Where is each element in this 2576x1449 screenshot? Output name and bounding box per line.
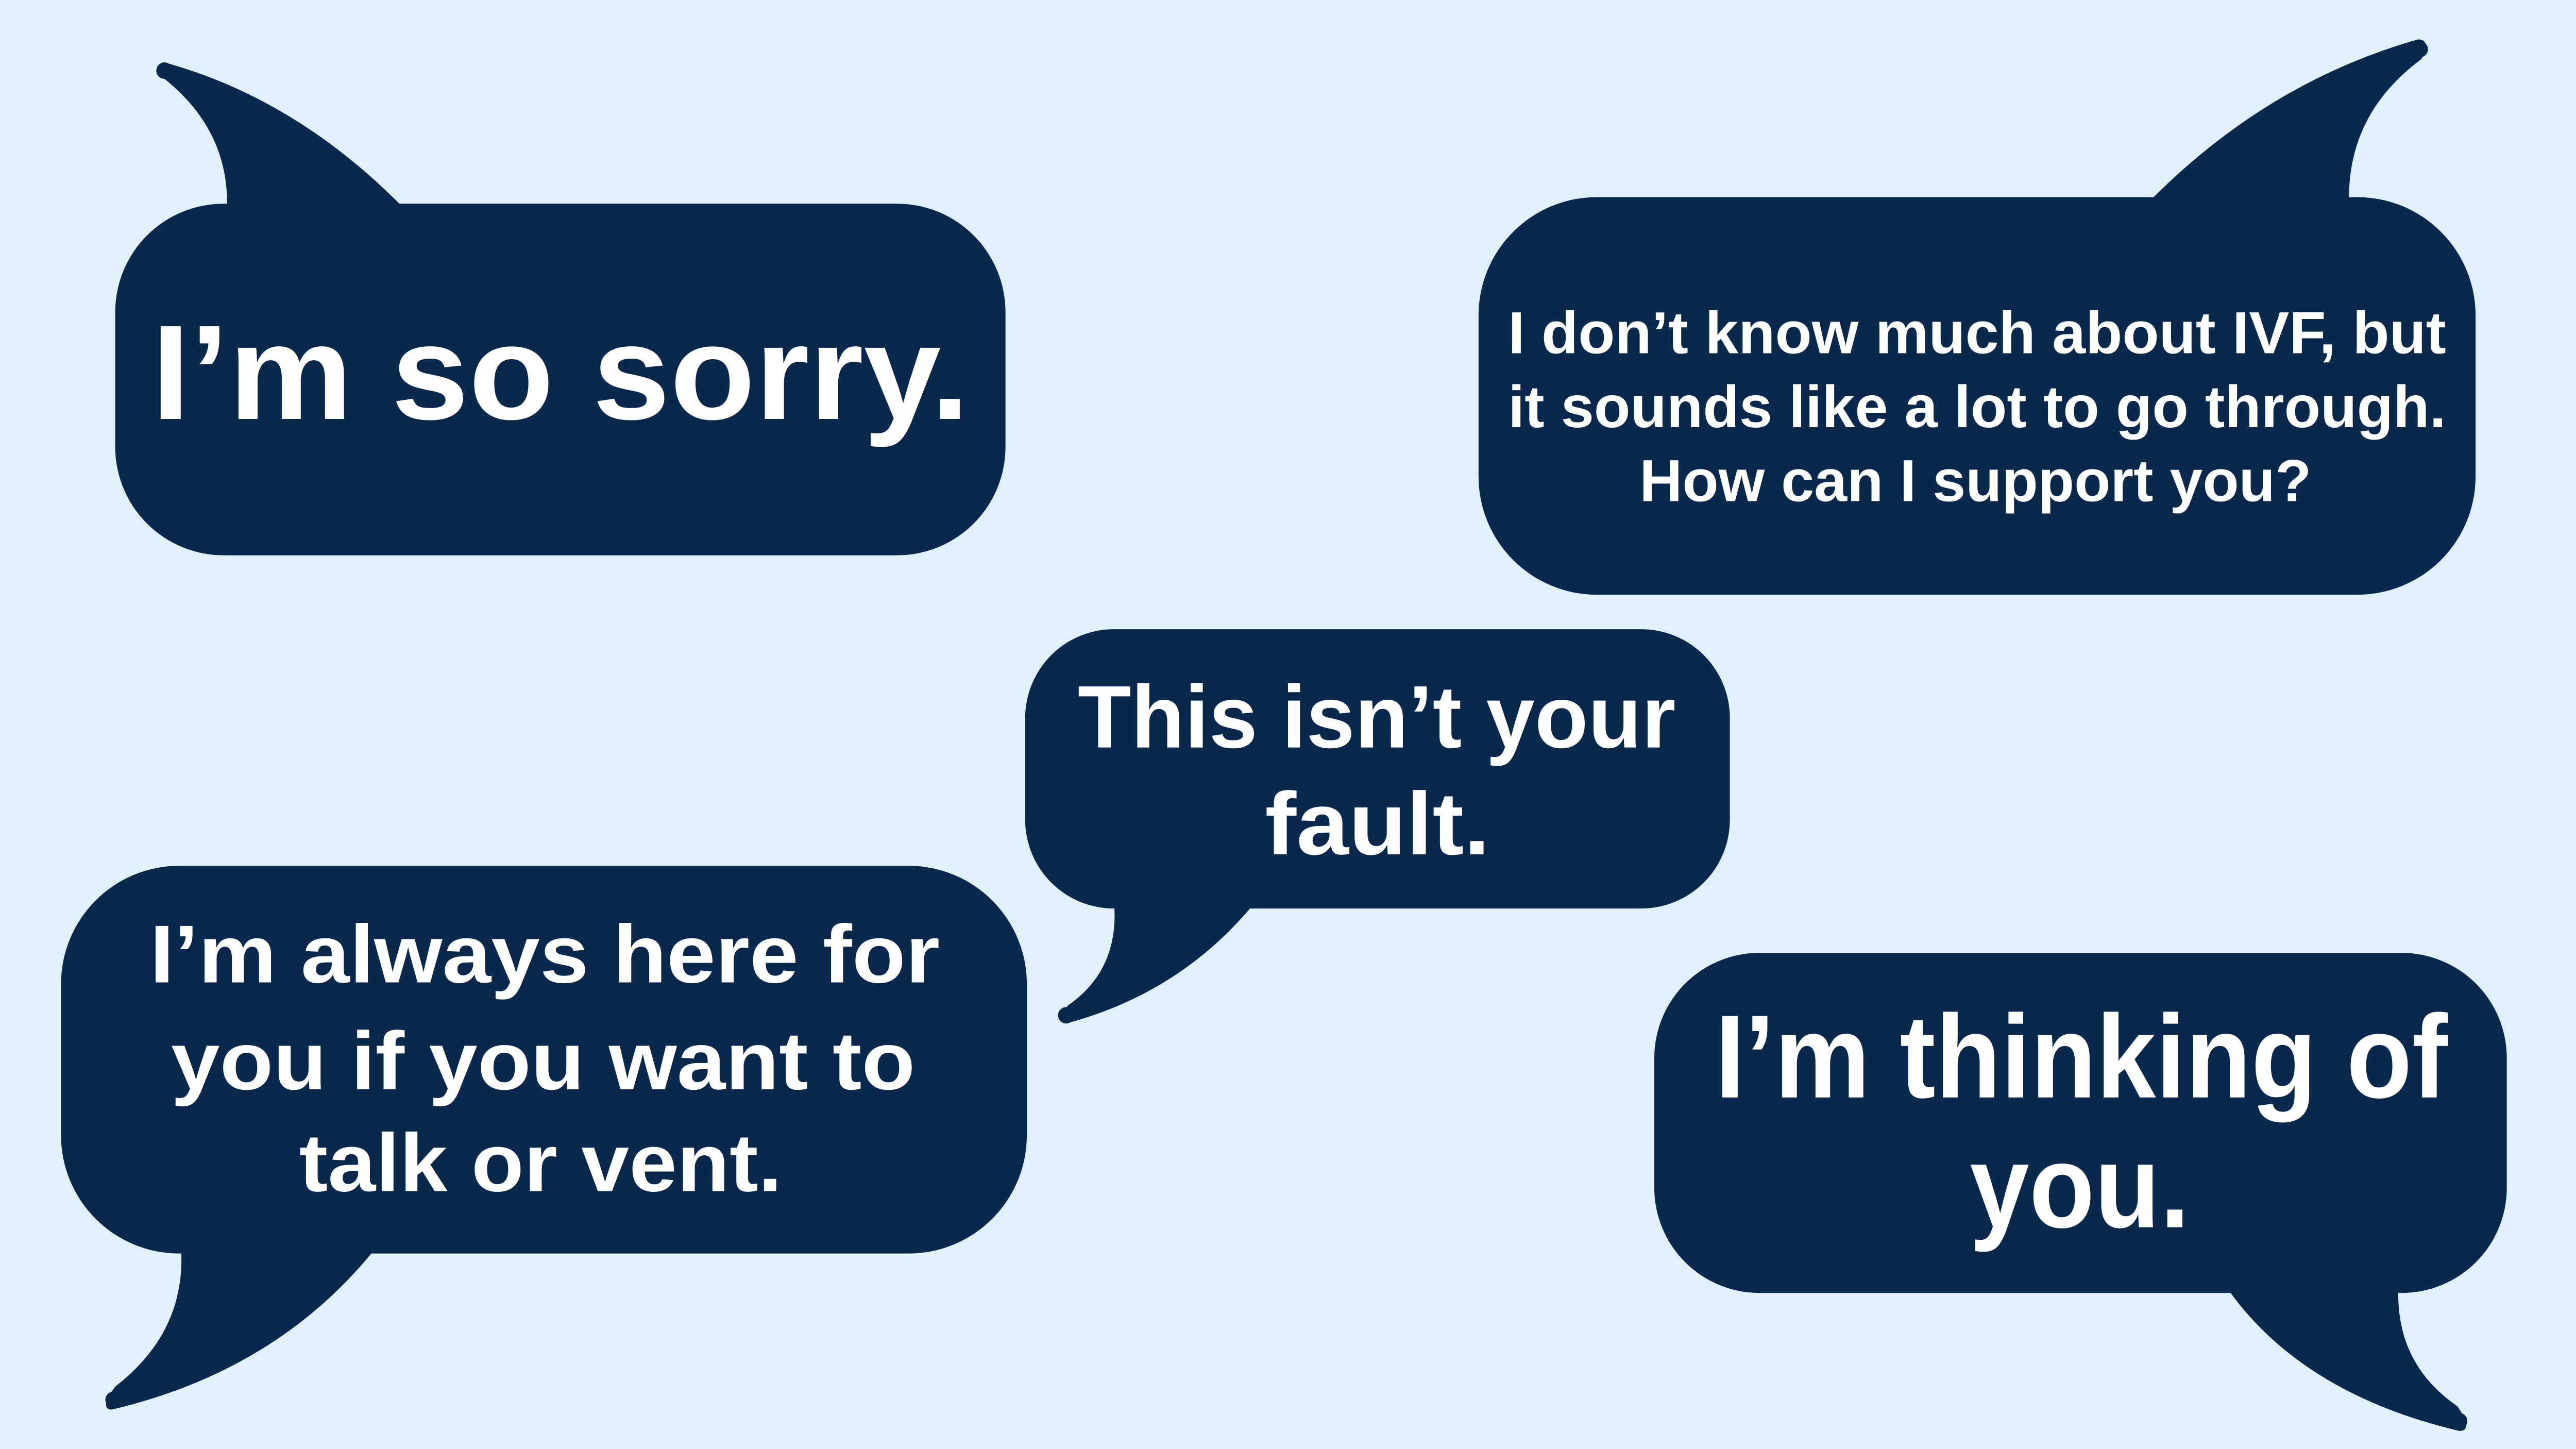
bubble: I'm always here for you [61,866,1027,1409]
bubble: I don't know much about IVF: it sounds like a lot to go through. [1508,374,2446,440]
bubble: I'm always here for you: I’m always here for [150,908,940,1000]
bubble: I'm thinking of you: you. [1970,1120,2190,1253]
bubble: I'm so sorry [115,62,1006,555]
bubble: I'm thinking of you [1654,953,2507,1431]
bubble: This isn't your fault: fault. [1265,774,1490,873]
bubble: I'm so sorry: I’m so sorry. [151,297,969,448]
bubble: I don't know much about IVF [1479,40,2476,595]
bubble: I don't know much about IVF: I don’t know much about IVF, but [1508,300,2446,366]
bubble: This isn't your fault: This isn’t your [1078,668,1675,767]
bubble: I'm thinking of you: I’m thinking of [1715,990,2448,1123]
bubble: I'm always here for you: you if you want to [171,1015,915,1107]
bubble: I'm always here for you: talk or vent. [299,1117,782,1208]
bubble: This isn't your fault [1025,629,1730,1023]
bubble: I don't know much about IVF: How can I support you? [1639,448,2311,514]
